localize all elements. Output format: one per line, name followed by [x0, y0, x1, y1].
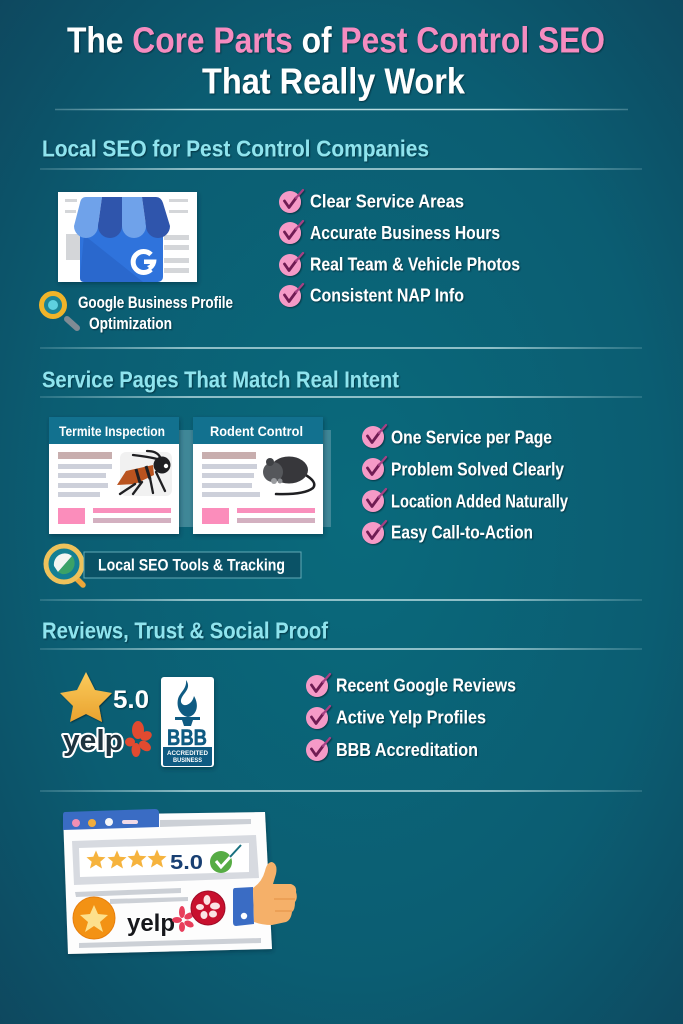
heading: service pages: Service Pages That Match Real Intent: [42, 366, 399, 392]
logo: yelp: [127, 906, 195, 937]
checklist: local SEO: [279, 190, 520, 307]
checklist: local SEO: Accurate Business Hours: [310, 223, 500, 243]
icon: thumbs up: [233, 862, 297, 926]
heading: local SEO: Local SEO for Pest Control Companies: [42, 136, 429, 162]
icon: star rating: 5.0: [113, 686, 149, 714]
logo: yelp: yelp: [127, 910, 175, 937]
label: google business profile optimization: Optimization: [89, 315, 172, 333]
panel: local SEO: [42, 190, 520, 333]
logo: BBB accredited business: BUSINESS: [173, 757, 203, 764]
label: google business profile optimization: [78, 294, 233, 333]
logo: yelp: yelp: [63, 725, 123, 757]
icon: google business profile storefront: [58, 192, 197, 282]
logo: BBB accredited business: [161, 677, 214, 767]
checklist: reviews: Active Yelp Profiles: [336, 708, 486, 728]
logo: BBB accredited business: BBB: [167, 725, 207, 750]
label: local SEO tools and tracking: Local SEO Tools & Tracking: [98, 556, 285, 574]
panel: reviews: [60, 672, 516, 767]
rating row: 5.0: [170, 852, 203, 874]
checklist: local SEO: Real Team & Vehicle Photos: [310, 254, 520, 274]
card: termite inspection: [49, 417, 179, 534]
icon: seo tools magnifier: [46, 546, 83, 585]
badge: red flower: [191, 891, 225, 925]
icon: star rating: [60, 672, 149, 722]
logo: yelp: [63, 721, 153, 757]
checklist: reviews: Recent Google Reviews: [336, 676, 516, 696]
panel: service pages: [46, 417, 568, 585]
card: rodent control: Rodent Control: [210, 423, 303, 439]
title: The Core Parts of Pest Control SEO: [67, 20, 605, 60]
icon: rodent: [263, 456, 314, 494]
checklist: service pages: One Service per Page: [391, 428, 552, 448]
badge: orange star: [73, 897, 115, 939]
rating row: [86, 845, 241, 874]
card: termite inspection: Termite Inspection: [59, 423, 165, 439]
heading: reviews: Reviews, Trust & Social Proof: [42, 618, 328, 644]
checklist: service pages: Location Added Naturally: [391, 492, 568, 512]
checklist: reviews: [306, 674, 516, 761]
checklist: reviews: BBB Accreditation: [336, 740, 478, 760]
icon: magnifier: [42, 294, 77, 328]
checklist: service pages: Easy Call-to-Action: [391, 522, 533, 542]
browser title bar: [63, 809, 159, 830]
checklist: service pages: [362, 425, 568, 544]
checklist: service pages: Problem Solved Clearly: [391, 460, 564, 480]
title: [67, 20, 605, 102]
label: google business profile optimization: Google Business Profile: [78, 294, 233, 312]
illustration: review browser window: [63, 809, 297, 954]
label: local SEO tools and tracking: [84, 552, 301, 578]
card: rodent control: [193, 417, 323, 534]
checklist: local SEO: Consistent NAP Info: [310, 286, 464, 306]
title: That Really Work: [202, 60, 466, 102]
icon: termite: [117, 451, 172, 496]
checklist: local SEO: Clear Service Areas: [310, 192, 464, 212]
logo: BBB accredited business: ACCREDITED: [167, 750, 208, 757]
